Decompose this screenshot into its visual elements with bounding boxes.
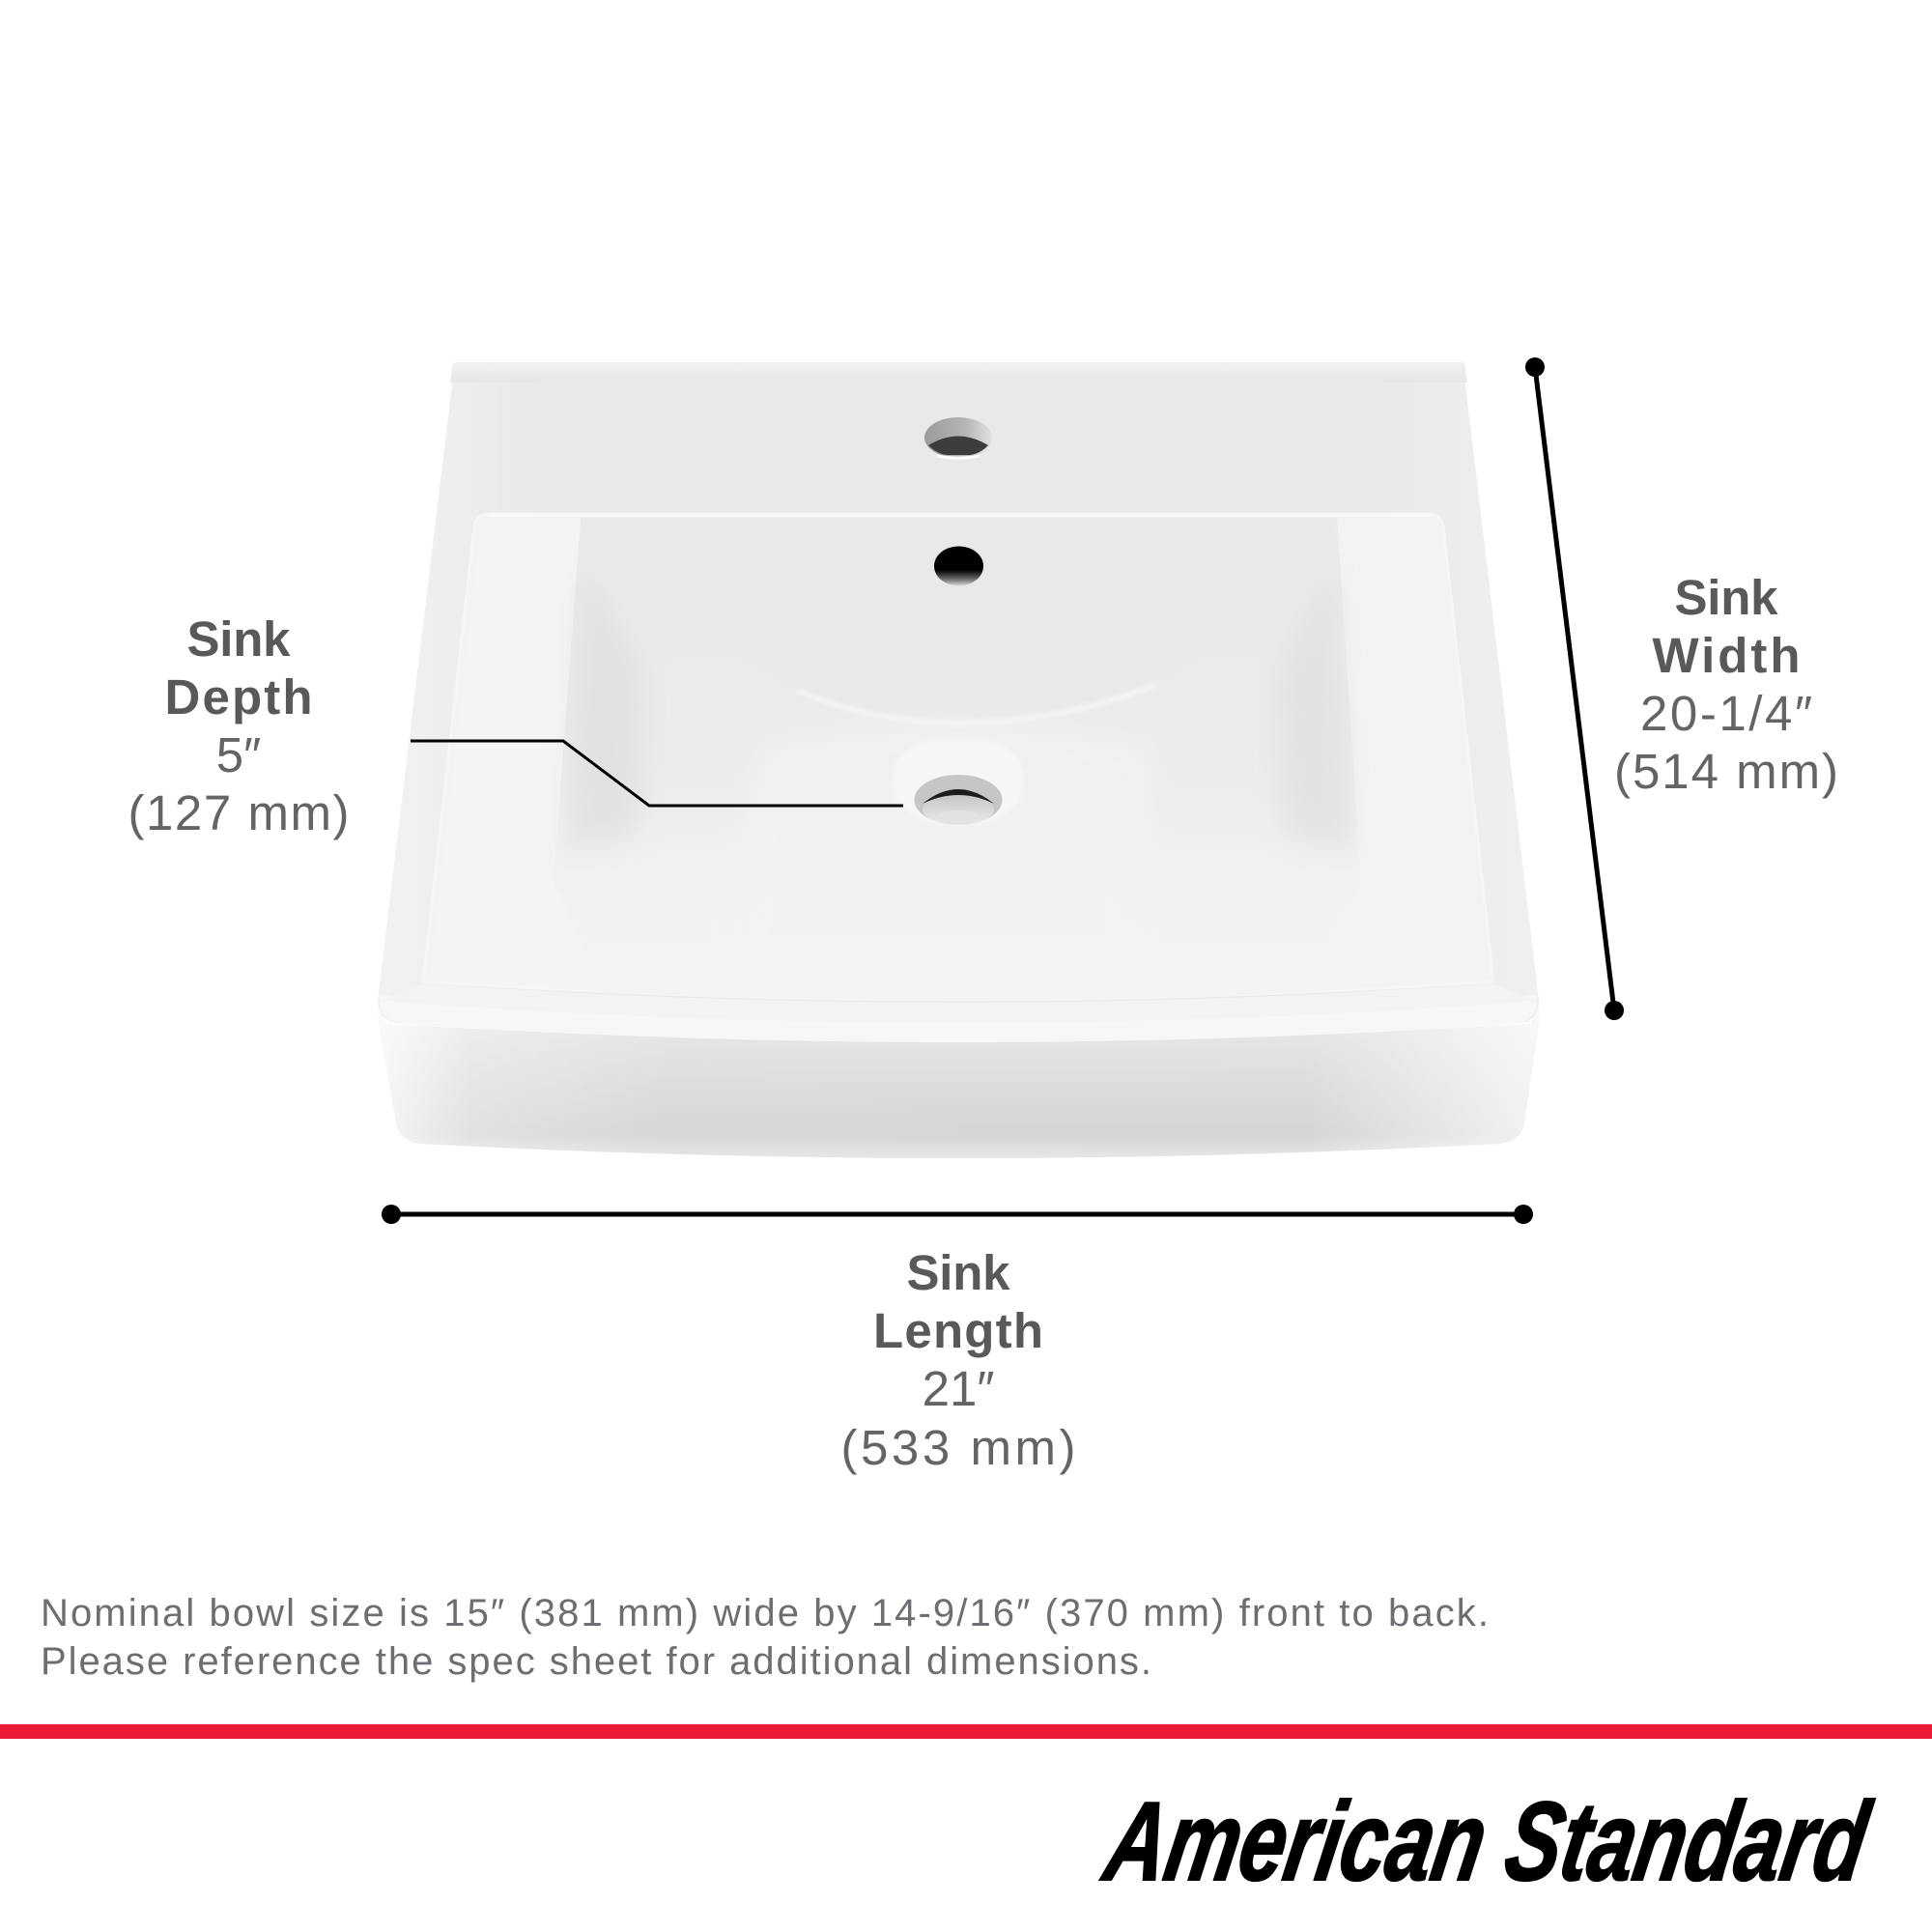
faucet hole — [924, 417, 992, 458]
sink length label — [840, 1245, 1076, 1475]
sink length dimension line — [382, 1205, 1533, 1224]
back bowl panel — [581, 518, 1337, 722]
sink depth label: (127 mm) — [128, 785, 350, 840]
sink width label: Width — [1652, 628, 1801, 683]
drain — [914, 775, 1003, 825]
footnote: Nominal bowl size is 15″ (381 mm) wide by 14-9/16″ (370 mm) front to back. — [41, 1592, 1489, 1634]
sink deck — [378, 362, 1539, 1042]
front rim — [380, 995, 1537, 1042]
sink depth leader line — [411, 741, 903, 806]
sink illustration — [378, 362, 1539, 1158]
footnote — [41, 1592, 1489, 1683]
sink width label: (514 mm) — [1614, 744, 1838, 799]
back lip — [450, 362, 1467, 383]
basin — [423, 514, 1493, 1000]
sink front face — [378, 1000, 1539, 1158]
sink width label: 20-1/4″ — [1640, 686, 1812, 741]
sink depth label: Sink — [187, 611, 291, 667]
footnote: Please reference the spec sheet for additional dimensions. — [41, 1640, 1151, 1683]
right shelf — [1304, 523, 1488, 989]
sink depth label — [128, 611, 350, 840]
left shelf — [430, 523, 601, 989]
red divider bar — [0, 1724, 1932, 1739]
sink length label: Sink — [906, 1245, 1010, 1300]
overflow hole — [934, 547, 983, 585]
sink length label: 21″ — [923, 1361, 994, 1416]
sink depth label: 5″ — [216, 727, 261, 782]
sink width label — [1614, 570, 1838, 799]
basin rim highlight — [488, 513, 1430, 517]
sink width dimension line — [1525, 357, 1624, 1020]
sink width label: Sink — [1675, 570, 1778, 625]
drain flare — [892, 740, 1024, 826]
sink length label: (533 mm) — [840, 1420, 1076, 1475]
sink length label: Length — [873, 1303, 1043, 1358]
sink depth label: Depth — [164, 669, 313, 724]
lower bowl highlight — [734, 720, 1159, 966]
bowl shading — [570, 560, 642, 850]
bowl — [554, 518, 1361, 1001]
